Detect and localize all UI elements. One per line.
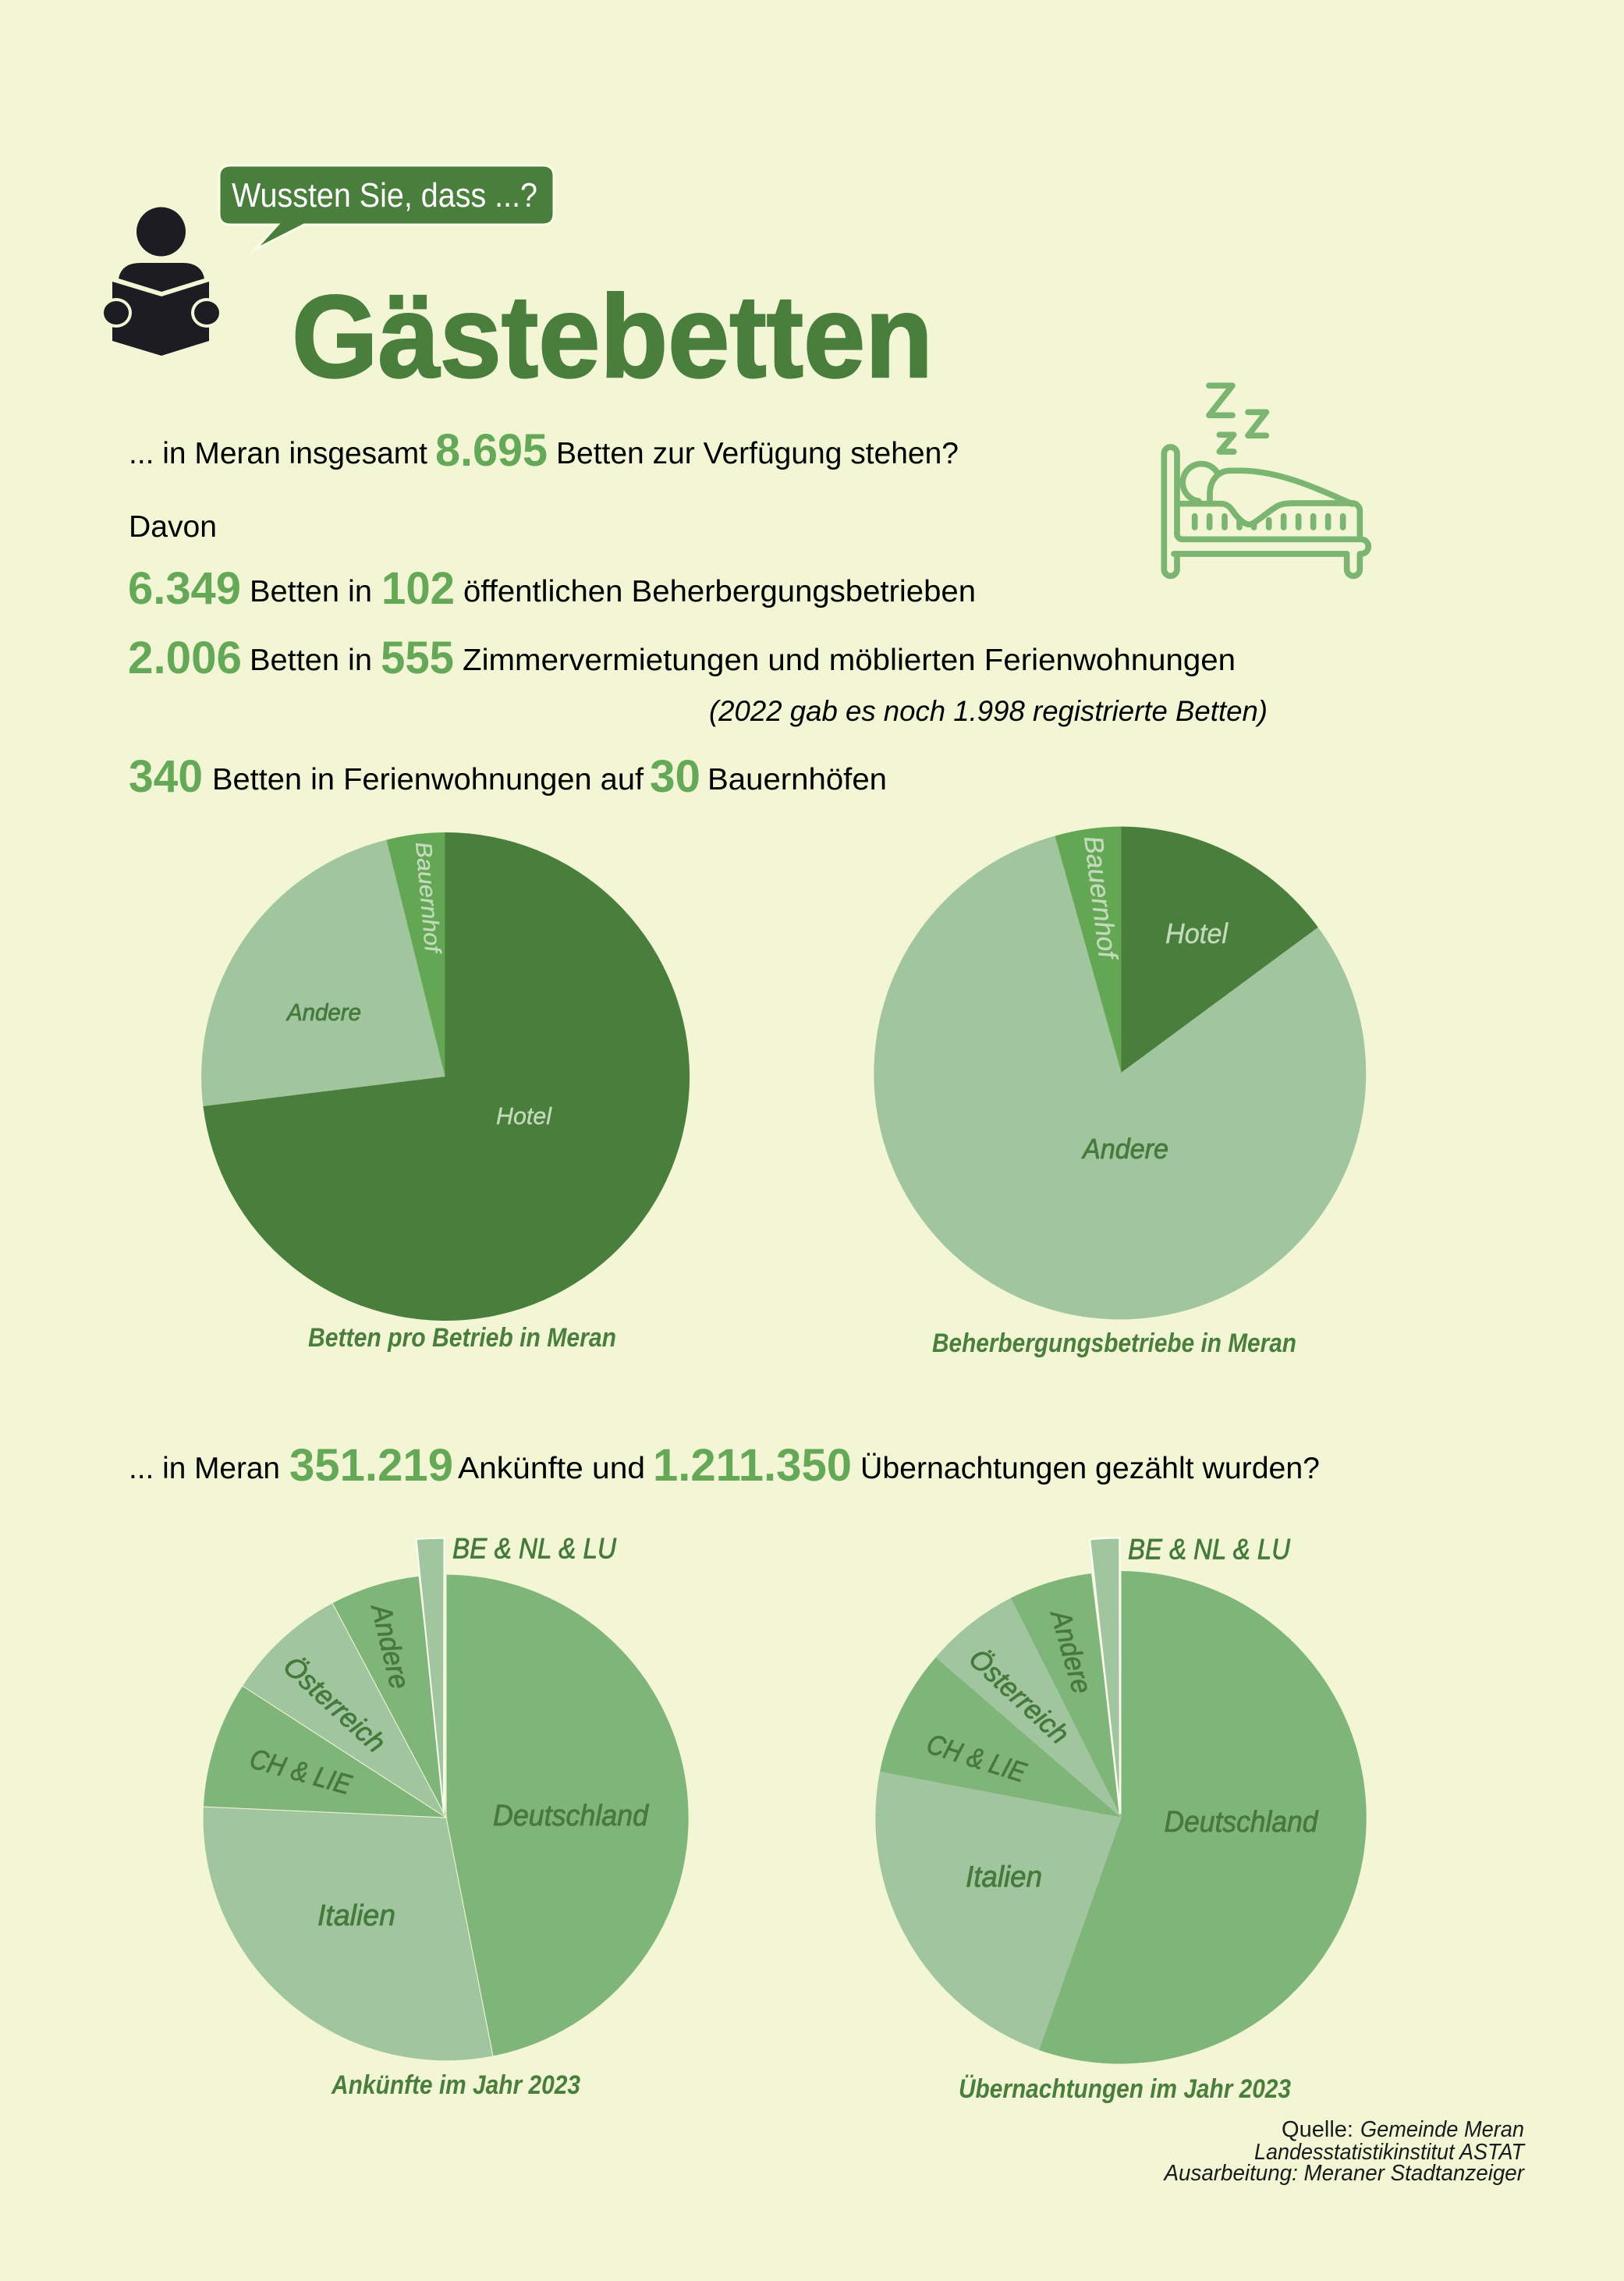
pie chart: Ankünfte	[203, 1532, 689, 2061]
pie chart: Beherbergungsbetriebe: Andere	[1081, 1133, 1168, 1165]
text: arrivals and overnight stays: ... in Meran	[129, 1452, 280, 1485]
caption: Beherbergungsbetriebe: Beherbergungsbetriebe in Meran	[932, 1329, 1296, 1358]
caption: Betten pro Betrieb: Betten pro Betrieb in Meran	[308, 1323, 616, 1353]
text: private room beds: Betten in	[250, 644, 372, 677]
pie chart: Ankünfte: Andere	[365, 1600, 417, 1692]
speech bubble	[219, 165, 554, 250]
text: total beds	[129, 425, 959, 476]
pie chart: Ankünfte: Österreich	[278, 1650, 392, 1759]
text: farm beds: Betten in Ferienwohnungen auf	[212, 763, 644, 796]
icon: sleeping person in bed	[1164, 385, 1368, 576]
text: public accommodation beds: öffentlichen Beherbergungsbetrieben	[463, 575, 976, 608]
text: arrivals and overnight stays: 351.219	[289, 1440, 453, 1491]
pie chart: Ankünfte: Italien	[317, 1900, 395, 1932]
text: total beds: 8.695	[435, 425, 548, 476]
text: arrivals and overnight stays: Ankünfte und	[458, 1452, 645, 1485]
text: farm beds	[129, 751, 887, 802]
pie chart: Übernachtungen: BE & NL & LU	[1128, 1534, 1290, 1565]
pie chart: Betten pro Betrieb: Andere	[285, 999, 361, 1026]
source credits: Ausarbeitung: Meraner Stadtanzeiger	[1163, 2161, 1525, 2186]
pie chart: Ankünfte: Deutschland	[493, 1800, 650, 1832]
pie chart: Übernachtungen: Andere	[1044, 1605, 1098, 1697]
pie chart: Beherbergungsbetriebe: Bauernhof	[1078, 834, 1122, 963]
source credits: Quelle:	[1282, 2117, 1353, 2142]
source credits: Gemeinde Meran	[1360, 2117, 1524, 2142]
icon: person reading a book	[101, 208, 222, 356]
speech bubble: Wussten Sie, dass ...?	[232, 176, 537, 215]
text: total beds: Betten zur Verfügung stehen?	[556, 437, 959, 470]
title: Gästebetten	[292, 271, 933, 402]
text: arrivals and overnight stays	[129, 1440, 1320, 1491]
text: Davon: Davon	[129, 510, 217, 544]
text: farm beds: Bauernhöfen	[707, 763, 887, 796]
pie chart: Übernachtungen: Deutschland	[1164, 1806, 1319, 1839]
text: private room beds: 555	[381, 633, 454, 683]
caption: Ankünfte: Ankünfte im Jahr 2023	[331, 2070, 580, 2100]
source credits	[1163, 2117, 1526, 2186]
text: private room beds: 2.006	[128, 633, 242, 683]
pie chart: Beherbergungsbetriebe: Hotel	[1165, 917, 1229, 949]
text: public accommodation beds	[128, 563, 976, 614]
text: arrivals and overnight stays: Übernachtungen gezählt wurden?	[860, 1452, 1320, 1485]
text: private room beds: Zimmervermietungen und möblierten Ferienwohnungen	[463, 644, 1236, 677]
caption: Übernachtungen: Übernachtungen im Jahr 2023	[959, 2074, 1291, 2104]
text: farm beds: 340	[129, 751, 203, 802]
text: farm beds: 30	[650, 751, 700, 802]
text: private room beds	[128, 633, 1236, 683]
pie chart: Ankünfte: CH & LIE	[246, 1742, 356, 1800]
text: public accommodation beds: Betten in	[250, 575, 372, 608]
pie chart: Betten pro Betrieb	[201, 832, 690, 1321]
pie chart: Beherbergungsbetriebe	[874, 827, 1366, 1319]
text: public accommodation beds: 6.349	[128, 563, 241, 614]
text: 2022 note: (2022 gab es noch 1.998 registrierte Betten)	[709, 695, 1268, 727]
text: arrivals and overnight stays: 1.211.350	[653, 1440, 852, 1491]
pie chart: Übernachtungen: CH & LIE	[923, 1727, 1030, 1789]
pie chart: Übernachtungen: Italien	[966, 1861, 1042, 1894]
source credits: Landesstatistikinstitut ASTAT	[1254, 2140, 1526, 2165]
pie chart: Betten pro Betrieb: Hotel	[496, 1102, 552, 1130]
pie chart: Ankünfte: BE & NL & LU	[452, 1532, 616, 1565]
text: total beds: ... in Meran insgesamt	[129, 437, 427, 470]
text: public accommodation beds: 102	[381, 563, 455, 614]
pie chart: Übernachtungen: Österreich	[963, 1642, 1076, 1750]
pie chart: Übernachtungen	[875, 1534, 1367, 2064]
pie chart: Betten pro Betrieb: Bauernhof	[410, 841, 445, 956]
